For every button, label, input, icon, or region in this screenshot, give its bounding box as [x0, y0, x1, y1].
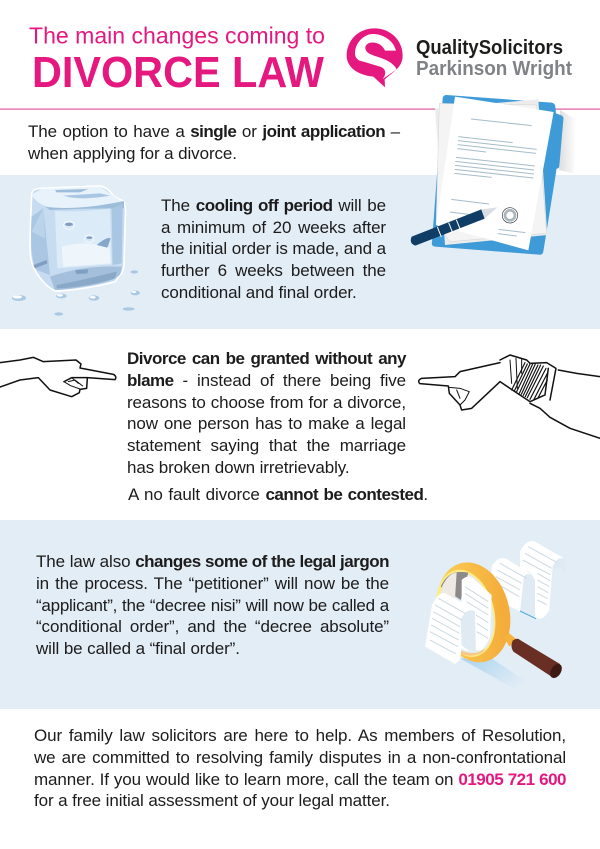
text: cooling off period: a minimum of 20 weeks after: [161, 218, 386, 237]
text: application option: The option to have a single or joint application –: [28, 122, 400, 141]
magnifier lens and ring: [426, 554, 521, 670]
title: [29, 22, 325, 97]
icon: ice cube: [12, 186, 140, 316]
text: call to action: we are committed to resolving family disputes in a non-confrontational: [34, 748, 566, 767]
scroll back: [492, 541, 565, 619]
seal: [502, 208, 518, 223]
text: legal jargon: The law also changes some of the legal jargon: [36, 552, 389, 571]
text: no blame divorce: Divorce can be granted without any: [127, 349, 406, 368]
header divider: [0, 108, 600, 110]
water droplets: [12, 270, 140, 316]
text: call to action: [34, 726, 566, 810]
scroll inside lens: [462, 577, 492, 651]
text: no blame divorce: has broken down irretrievably.: [127, 458, 350, 477]
text: no blame divorce: reasons to choose from for a divorce,: [127, 393, 406, 412]
icon: speech bubble S: [347, 28, 403, 87]
pen: [411, 207, 497, 246]
text: cannot be contested: A no fault divorce cannot be contested.: [128, 485, 428, 504]
text: call to action: Our family law solicitors are here to help. As members of Resolution,: [34, 726, 566, 745]
icon: right pointing hand with sleeve: [419, 355, 600, 438]
text: legal jargon: in the process. The “petitioner” will now be the: [36, 574, 389, 593]
logo: [347, 28, 572, 87]
text: call to action: for a free initial assessment of your legal matter.: [34, 791, 390, 810]
icon: documents in folder with pen: [411, 95, 577, 255]
text: cooling off period: The cooling off period will be: [161, 196, 386, 215]
text: no blame divorce: blame - instead of there being five: [127, 371, 406, 390]
logo wordmark: Parkinson Wright: [416, 58, 572, 80]
text: application option: [28, 122, 400, 163]
text: legal jargon: [36, 552, 390, 658]
text: no blame divorce: now one person has to make a legal: [127, 414, 406, 433]
title: The main changes coming to: [29, 22, 325, 48]
icon: left pointing hand: [0, 357, 116, 397]
text: legal jargon: “conditional order”, and the “decree absolute”: [36, 617, 389, 636]
text: cooling off period: conditional and final order.: [161, 283, 357, 302]
scroll front: [425, 593, 475, 664]
logo wordmark: [416, 37, 572, 80]
magnifier handle: [503, 633, 564, 680]
text: cooling off period: further 6 weeks between the: [161, 261, 386, 280]
text: call to action: manner. If you would like to learn more, call the team on 01905 721 600: [34, 770, 566, 789]
title: DIVORCE LAW: [32, 48, 324, 97]
text: cooling off period: [161, 196, 386, 302]
text: legal jargon: “applicant”, the “decree nisi” will now be called a: [36, 596, 389, 615]
text: cooling off period: the initial order is made, and a: [161, 239, 386, 258]
sleeve cuff: [500, 355, 556, 402]
icon: magnifying glass over scroll: [425, 541, 565, 690]
text: application option: when applying for a divorce.: [28, 144, 237, 163]
text: no blame divorce: [127, 349, 406, 477]
logo wordmark: QualitySolicitors: [416, 37, 563, 59]
text: legal jargon: will be called a “final order”.: [36, 639, 240, 658]
background band: legal jargon: [0, 520, 600, 709]
background band: cooling off: [0, 175, 600, 329]
text: no blame divorce: statement saying that the marriage: [127, 436, 406, 455]
